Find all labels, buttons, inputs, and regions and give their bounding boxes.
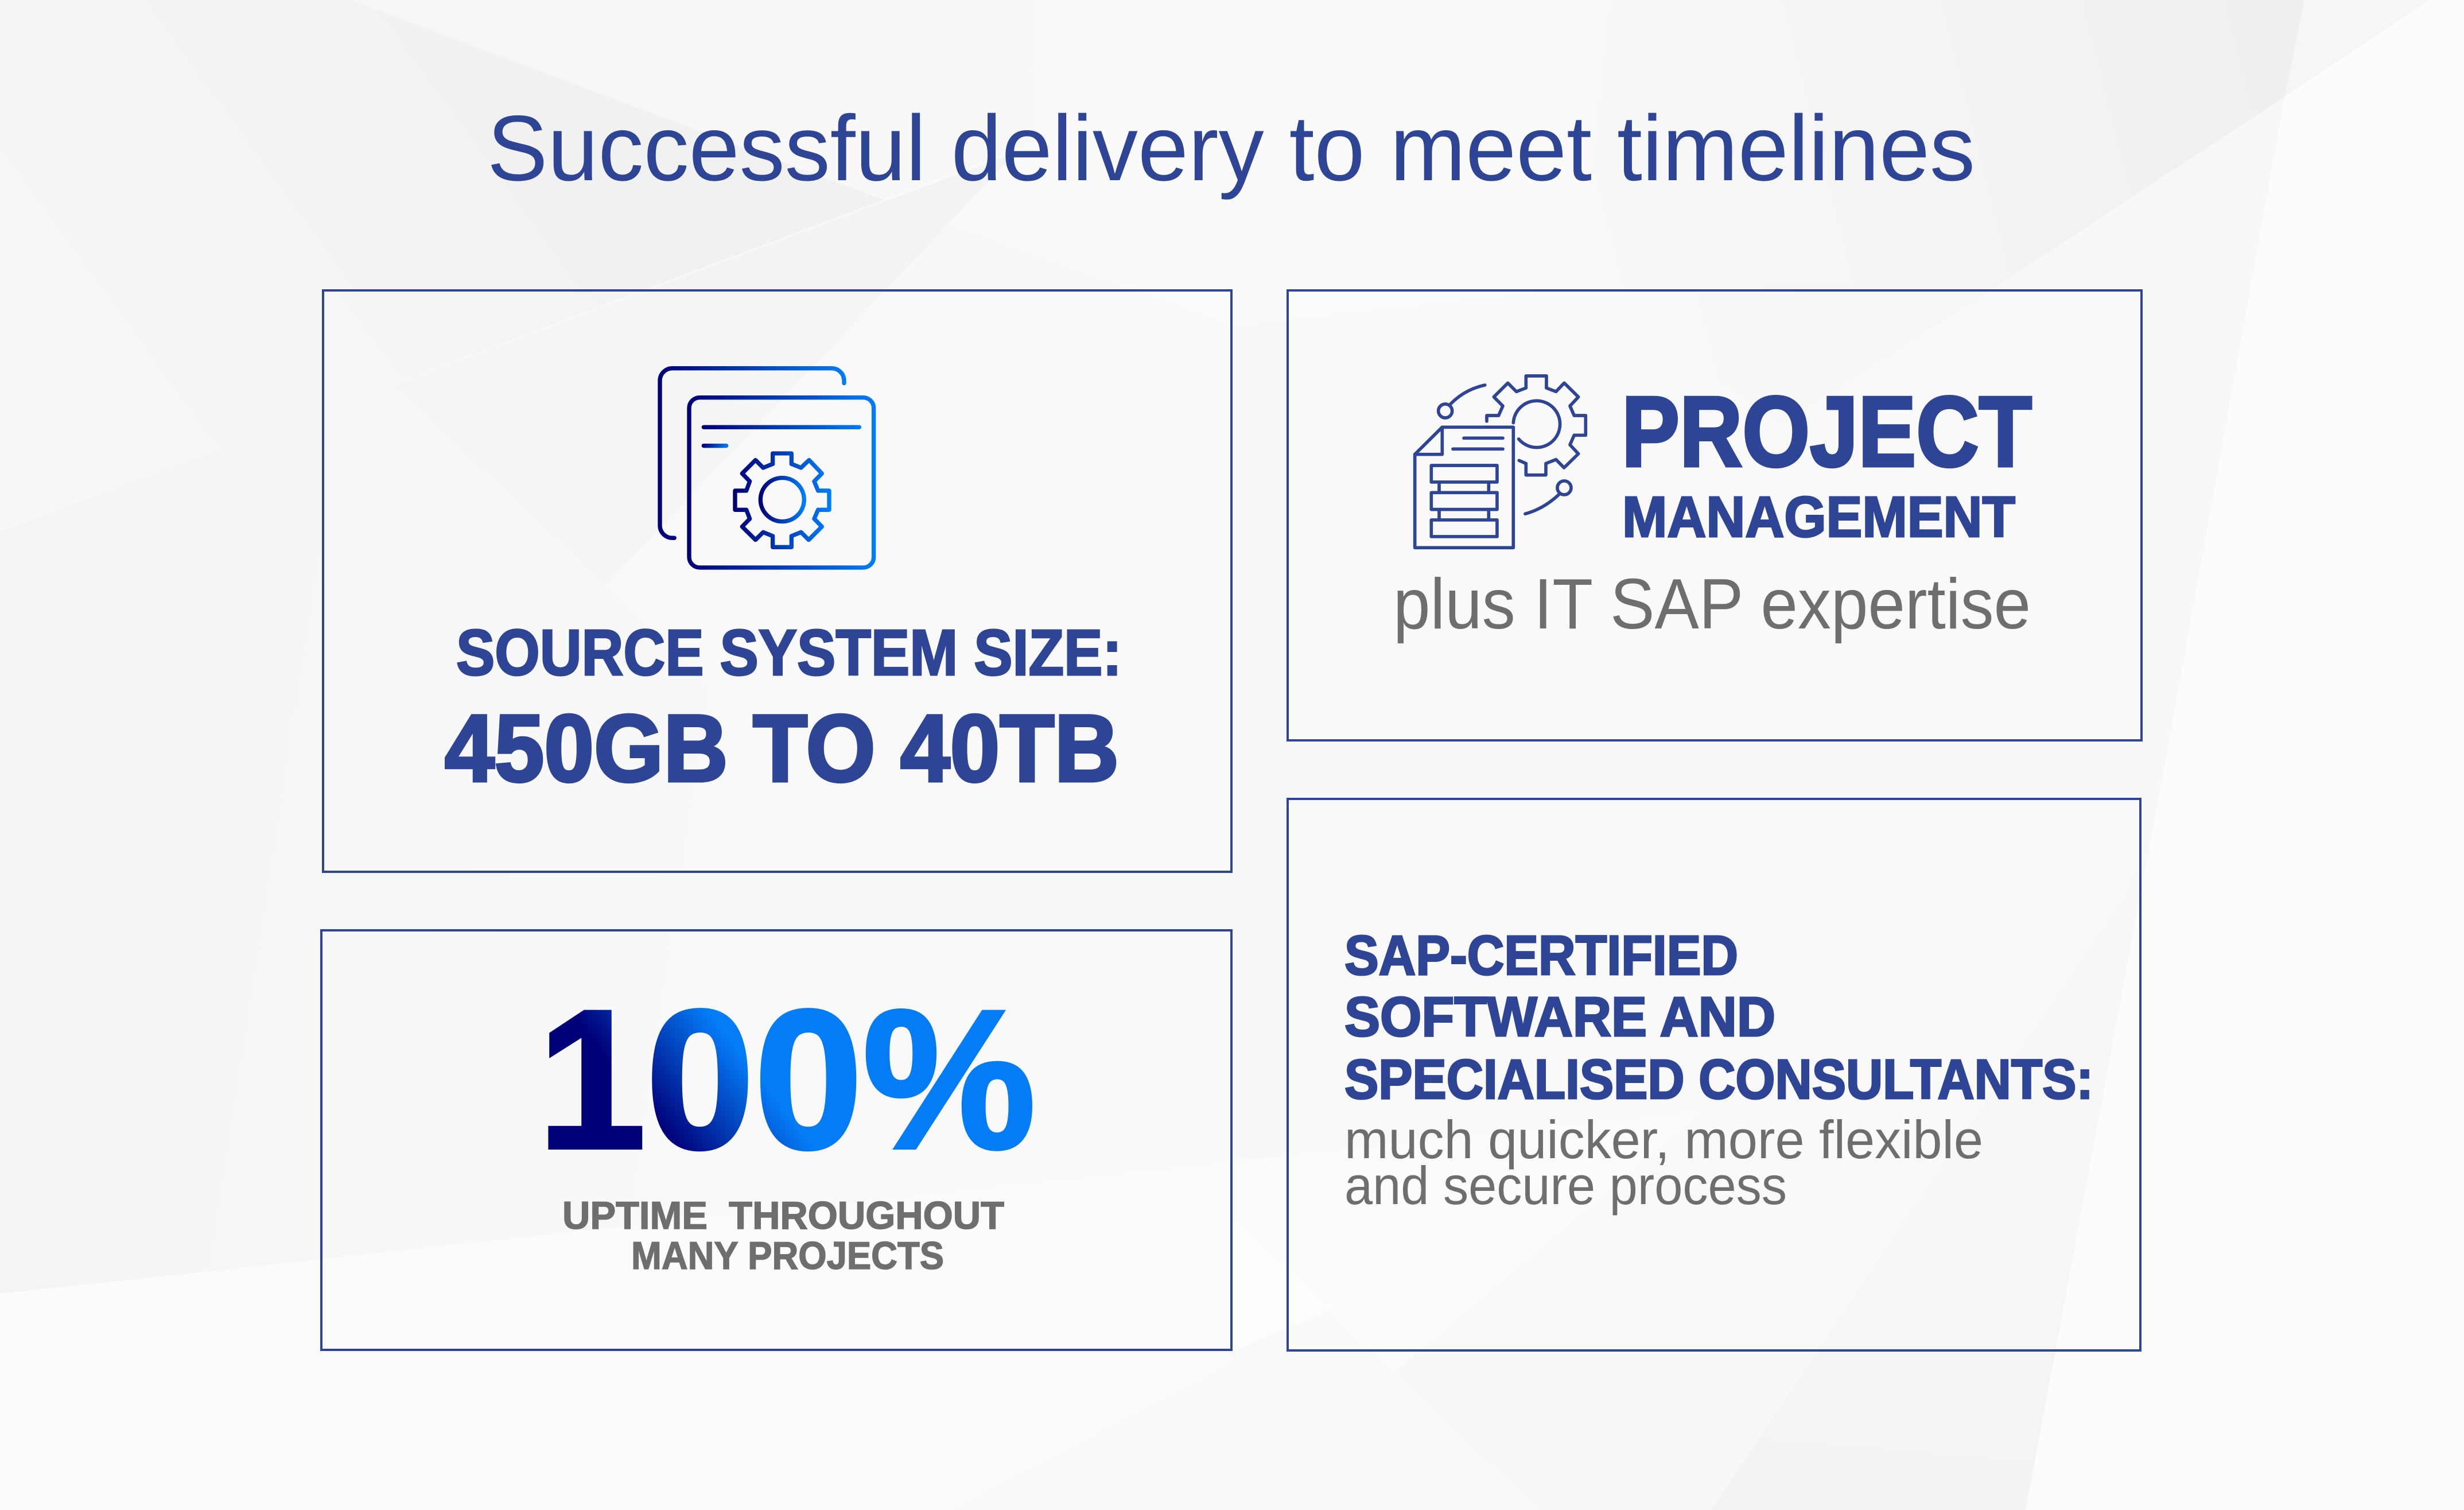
value: 450GB to 40TB: 450GB TO 40TB: [445, 696, 1119, 802]
value: 100%: 100%: [538, 969, 1036, 1190]
panel: project management: [1288, 290, 2142, 740]
description: much quicker, more flexible: [1344, 1109, 1983, 1170]
heading: SAP-certified software and specialised consultants: SOFTWARE AND: [1344, 985, 1775, 1048]
caption: uptime throughout many projects: MANY PROJECTS: [631, 1234, 944, 1278]
panel: SAP-certified: [1288, 799, 2140, 1350]
heading: source system size: SOURCE SYSTEM SIZE:: [456, 616, 1122, 689]
icon: window with gear: [660, 368, 874, 568]
caption: uptime throughout many projects: [562, 1194, 1004, 1278]
title: Successful delivery to meet timelines: [487, 96, 1975, 200]
heading: SAP-certified software and specialised consultants: SPECIALISED CONSULTANTS:: [1344, 1048, 2093, 1111]
heading: SAP-certified software and specialised consultants: [1344, 924, 2093, 1111]
caption: uptime throughout many projects: UPTIME THROUGHOUT: [562, 1194, 1004, 1237]
heading: management: MANAGEMENT: [1622, 485, 2015, 549]
panel: uptime: [321, 930, 1231, 1350]
heading: SAP-certified software and specialised consultants: SAP-CERTIFIED: [1344, 924, 1738, 987]
description: and secure process: [1344, 1155, 1787, 1216]
icon: document and gear: [1415, 376, 1585, 548]
panel: source system size: [323, 290, 1231, 872]
subtitle: plus IT SAP expertise: plus IT SAP expertise: [1393, 565, 2031, 644]
description: [1344, 1109, 1983, 1216]
heading: project: PROJECT: [1622, 375, 2032, 487]
